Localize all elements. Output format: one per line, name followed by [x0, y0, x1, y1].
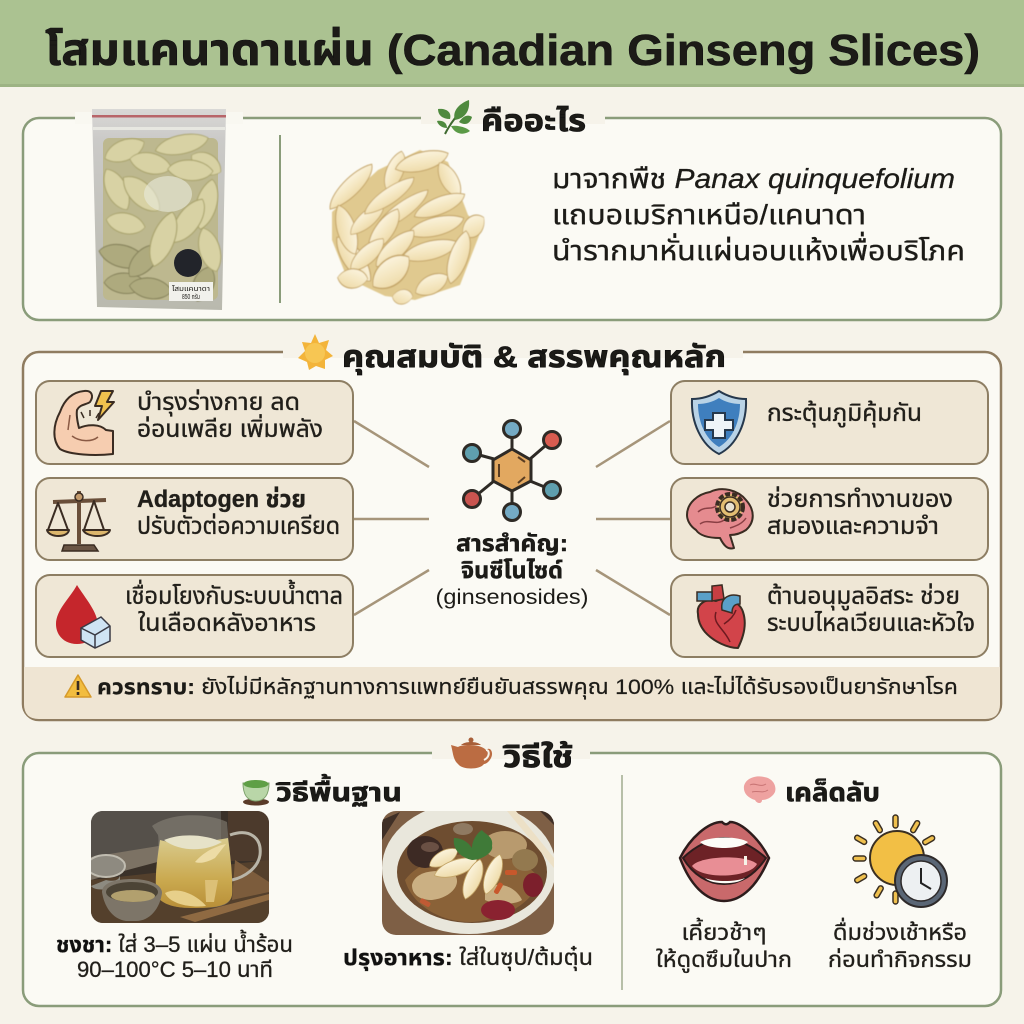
- description text: [552, 163, 965, 266]
- caption: when to drink: ดื่มช่วงเช้าหรือ: [833, 917, 967, 945]
- card: blood sugar: [36, 575, 353, 657]
- icon: heart: [697, 585, 745, 648]
- icon: leaf sprig: [437, 100, 472, 134]
- caption: tea: ชงชา: ใส่ 3–5 แผ่น น้ำร้อน: [56, 929, 293, 957]
- caption: chew slowly: เคี้ยวช้าๆ: [682, 917, 766, 945]
- key compound label: (ginsenosides): [436, 586, 588, 609]
- icon: balance scale: [47, 491, 110, 551]
- caption: chew slowly: [656, 917, 792, 973]
- panel: properties and benefits: [23, 334, 1001, 720]
- icon: blood drop and sugar cube: [56, 585, 110, 648]
- card: brain function: [671, 478, 988, 560]
- title banner: โสมแคนาดาแผ่น (Canadian Ginseng Slices): [45, 26, 980, 75]
- key compound label: สารสำคัญ:: [456, 530, 568, 556]
- key compound label: จินซีโนไซด์: [461, 557, 563, 583]
- caption: tea: 90–100°C 5–10 นาที: [77, 957, 273, 982]
- card: adaptogen: [36, 478, 353, 560]
- caution band: [24, 667, 1000, 719]
- photo: bag of ginseng slices: [92, 109, 226, 310]
- subheading: tips: เคล็ดลับ: [785, 777, 880, 807]
- icon: tea cup: [243, 780, 269, 806]
- photo: bag of ginseng slices: โสมแคนาดา: [172, 285, 210, 293]
- text: กระตุ้นภูมิคุ้มกัน: [767, 400, 922, 428]
- card: antioxidant and heart: ระบบไหลเวียนและหัวใจ: [767, 610, 975, 637]
- heading: what is it: คืออะไร: [481, 105, 586, 138]
- text: เชื่อมโยงกับระบบน้ำตาล: [125, 579, 343, 610]
- key compound label: [436, 530, 588, 609]
- text: ช่วยการทำงานของ: [767, 485, 953, 513]
- caption: when to drink: ก่อนทำกิจกรรม: [828, 947, 972, 972]
- card: energy: [36, 381, 353, 464]
- caption: cooking: ปรุงอาหาร: ใส่ในซุป/ต้มตุ๋น: [343, 945, 593, 971]
- photo: ginseng soup bowl: [382, 802, 556, 935]
- card: antioxidant and heart: [671, 575, 988, 657]
- description text: นำรากมาหั่นแผ่นอบแห้งเพื่อบริโภค: [552, 231, 965, 266]
- icon: teapot: [451, 738, 492, 768]
- card: energy: อ่อนเพลีย เพิ่มพลัง: [137, 413, 323, 443]
- description text: แถบอเมริกาเหนือ/แคนาดา: [552, 199, 866, 230]
- subheading: basic methods: วิธีพื้นฐาน: [276, 774, 402, 807]
- heading: how to use: วิธีใช้: [502, 741, 573, 774]
- caption: chew slowly: ให้ดูดซึมในปาก: [656, 947, 792, 973]
- card: immunity: [671, 381, 988, 464]
- card: brain function: สมองและความจำ: [767, 513, 939, 540]
- heading: properties and benefits: คุณสมบัติ & สรรพคุณหลัก: [342, 341, 726, 375]
- title banner: [0, 0, 1024, 87]
- icon: ginsenoside molecule: [464, 420, 560, 520]
- panel: what is it: [23, 100, 1001, 320]
- text: ต้านอนุมูลอิสระ ช่วย: [767, 582, 960, 611]
- icon: sun and clock: [853, 815, 947, 907]
- text: Adaptogen ช่วย: [137, 485, 306, 513]
- photo: ginseng tea in glass jug: [87, 811, 269, 923]
- icon: flexed arm: [54, 391, 114, 455]
- text: บำรุงร่างกาย ลด: [137, 388, 300, 417]
- connector lines: [354, 421, 670, 615]
- icon: mouth: [680, 822, 769, 901]
- icon: sun burst: [298, 334, 333, 370]
- icon: warning triangle: [65, 675, 91, 697]
- icon: brain with gear: [687, 489, 753, 549]
- icon: brain: [744, 776, 775, 803]
- photo: bag of ginseng slices: 850 กรัม: [182, 293, 200, 301]
- card: adaptogen: ปรับตัวต่อความเครียด: [137, 512, 340, 540]
- icon: shield: [692, 391, 746, 454]
- photo: pile of ginseng slices: [322, 148, 489, 308]
- caution text: ควรทราบ: ยังไม่มีหลักฐานทางการแพทย์ยืนยันสรรพคุณ 100% และไม่ได้รับรองเป็นยารักษาโรค: [97, 675, 958, 700]
- caption: when to drink: [828, 917, 972, 972]
- caption: tea: [56, 929, 293, 982]
- panel: how to use: [23, 738, 1001, 1006]
- description text: มาจากพืช Panax quinquefolium: [552, 163, 955, 194]
- card: blood sugar: ในเลือดหลังอาหาร: [138, 610, 316, 637]
